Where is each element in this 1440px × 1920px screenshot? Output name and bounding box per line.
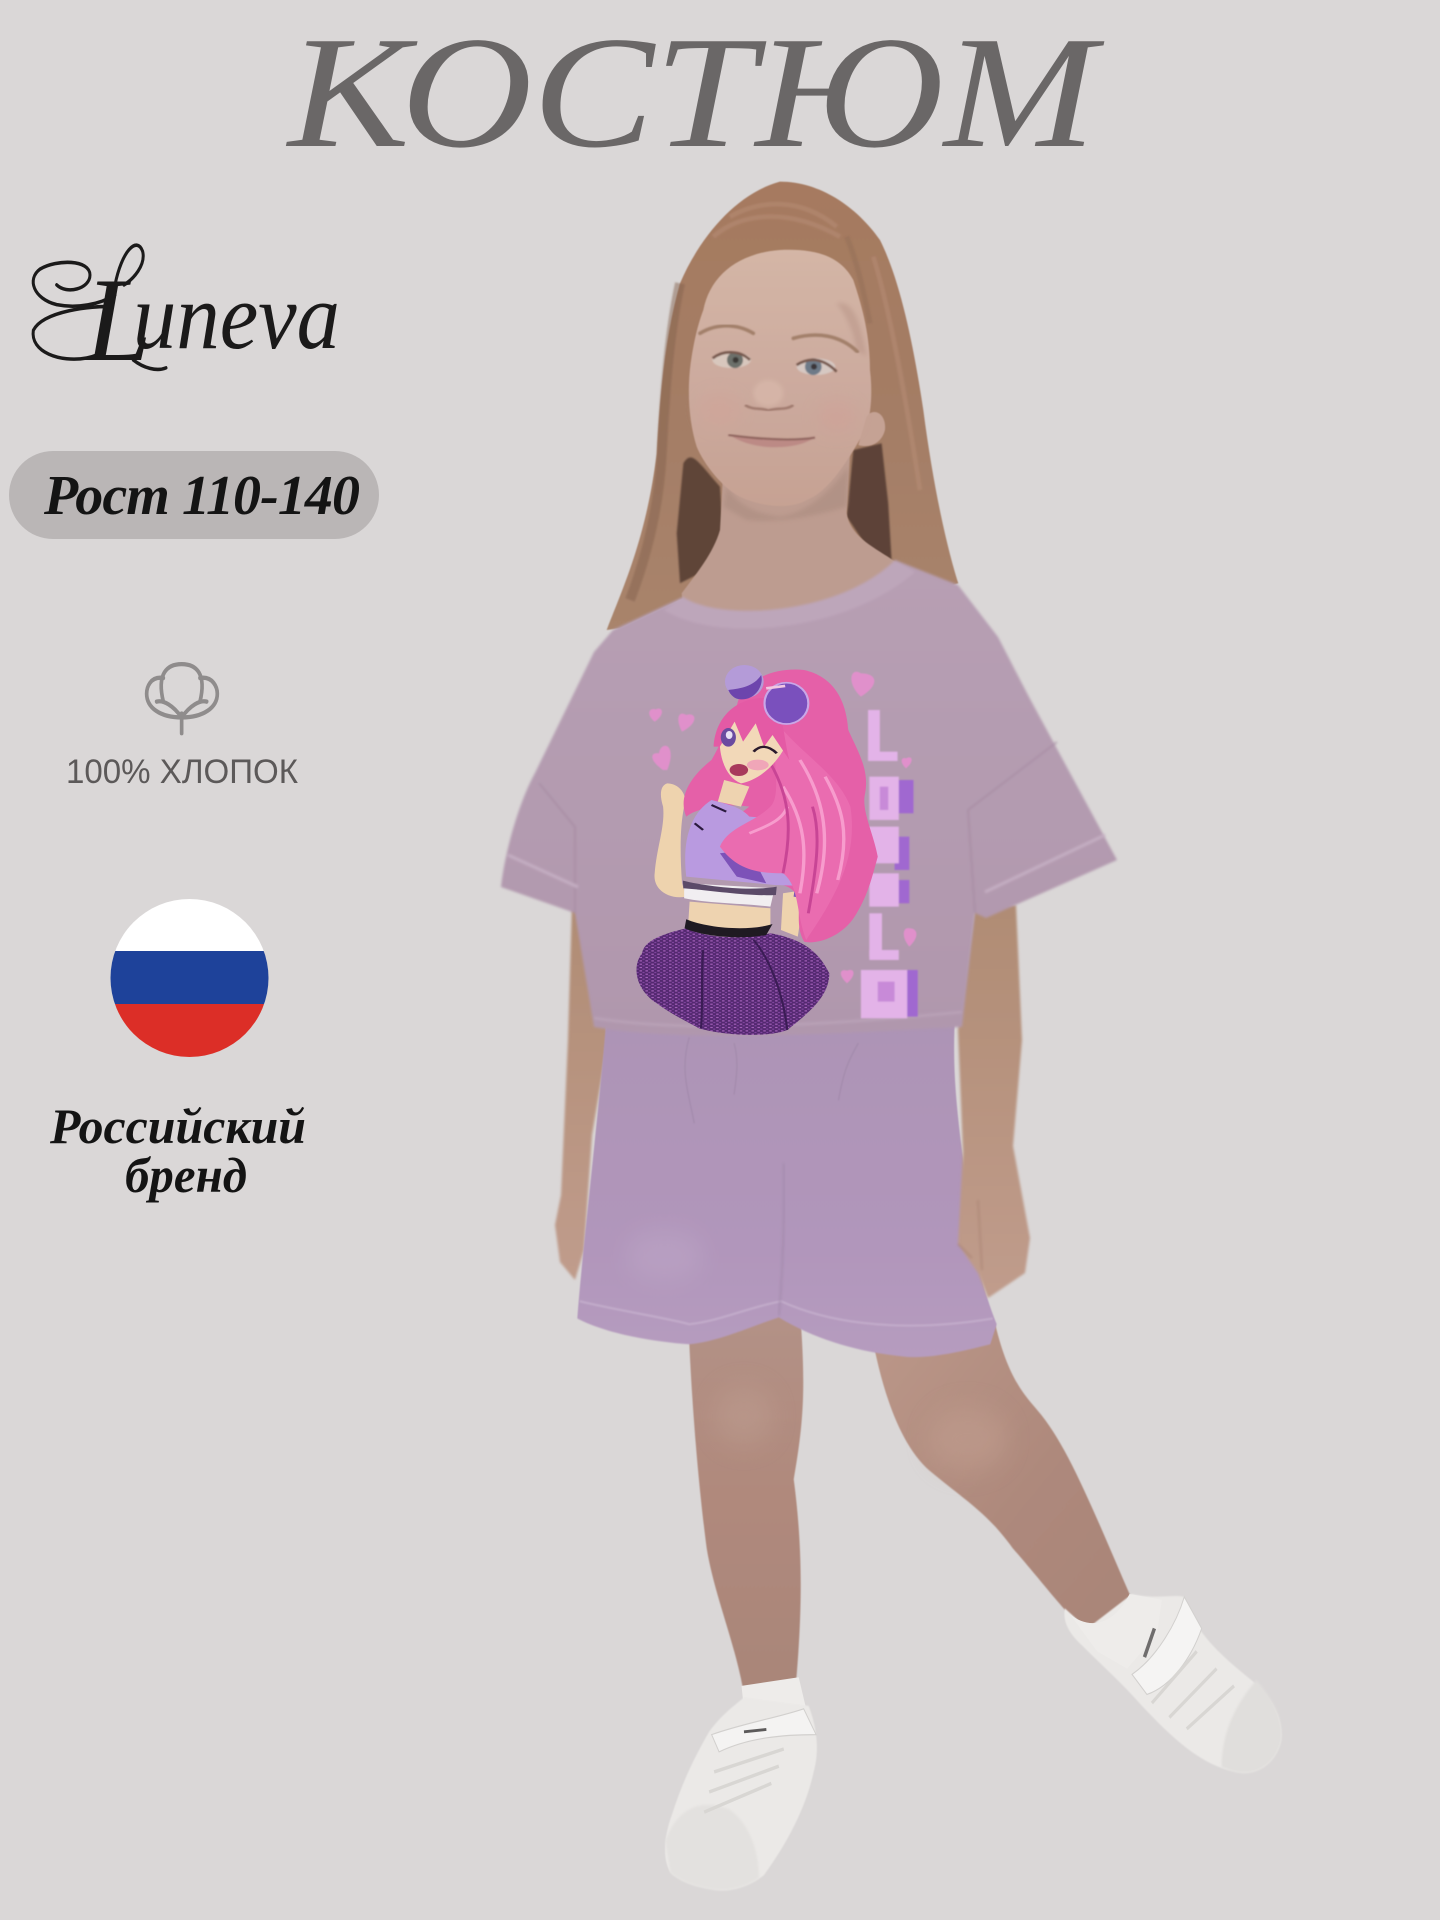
standing leg: [688, 1307, 803, 1689]
ear: [858, 412, 885, 446]
cotton label: 100% ХЛОПОК: [66, 753, 298, 791]
brand logo: Luneva: uneva: [133, 265, 340, 369]
right leg: [871, 1324, 1132, 1646]
white crop band: [684, 883, 775, 907]
right arm and hand: [958, 905, 1030, 1298]
bangs: [714, 698, 789, 760]
face shape: [689, 250, 871, 506]
shorts: [577, 1009, 997, 1357]
icon: Russian flag circle: [110, 899, 270, 1058]
standing sock: [741, 1677, 806, 1709]
brand logo: Luneva: [33, 245, 340, 386]
shoe: raised foot: [1064, 1594, 1282, 1773]
brand logo: Luneva: L: [83, 253, 152, 386]
shirt print: anime girl: [637, 665, 918, 1035]
raised arm: [654, 783, 686, 897]
skirt: [637, 928, 829, 1035]
lilac top: [685, 800, 825, 887]
Russian brand caption: бренд: [125, 1147, 247, 1203]
forehead side shadow: [837, 303, 867, 357]
eyebrows: [700, 326, 857, 352]
left arm: [555, 905, 608, 1280]
face: [689, 237, 885, 506]
legs and feet: [665, 1307, 1282, 1890]
neck: [682, 453, 895, 643]
hairline strands: [847, 237, 870, 323]
anime eyes, mouth, blush: [721, 728, 736, 747]
shoe: standing foot: [665, 1697, 817, 1890]
back hair: [607, 182, 958, 630]
height range pill: Рост 110-140: [43, 465, 360, 527]
nose: [745, 380, 793, 411]
height range pill: [9, 451, 379, 539]
waistband: [685, 919, 773, 937]
t-shirt: [501, 560, 1117, 1036]
front hair fall: [720, 720, 852, 940]
icon: cotton flower: [147, 664, 217, 733]
anime face: [720, 718, 785, 783]
raised sock: [1070, 1594, 1162, 1669]
smile: [728, 435, 815, 447]
vertical lettering: [861, 710, 918, 1018]
back arm: [781, 890, 805, 937]
eyes: [712, 352, 837, 375]
back hair strands: [684, 669, 878, 942]
Russian brand caption: Российский: [49, 1098, 306, 1154]
Russian brand caption: [49, 1098, 306, 1203]
sunglasses: [725, 665, 764, 698]
midriff: [688, 902, 770, 929]
title: КОСТЮМ: [286, 3, 1105, 181]
anime neck: [718, 780, 749, 807]
child model photo illustration: [501, 182, 1282, 1890]
cheeks: [700, 393, 740, 427]
hearts: [649, 672, 916, 983]
